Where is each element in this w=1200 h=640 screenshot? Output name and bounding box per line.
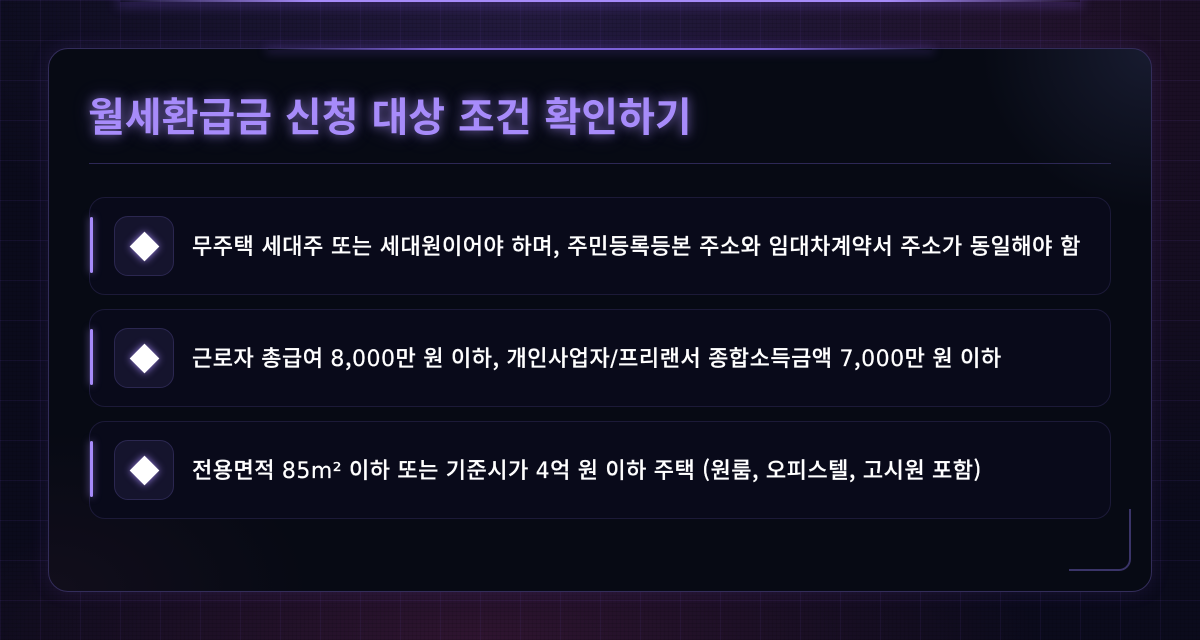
item 2 text: 근로자 총급여 8,000만 원 이하, 개인사업자/프리랜서 종합소득금액 7,000만 원 이하	[192, 341, 1002, 373]
item 1 text: 무주택 세대주 또는 세대원이어야 하며, 주민등록등본 주소와 임대차계약서 주소가 동일해야 함	[192, 229, 1081, 261]
panel: main card	[48, 48, 1152, 592]
top glow bar	[120, 0, 1080, 2]
item 3 icon: diamond	[114, 440, 174, 500]
item 2 accent bar	[90, 329, 93, 385]
item 1 accent bar	[90, 217, 93, 273]
item 3 text: 전용면적 85m² 이하 또는 기준시가 4억 원 이하 주택 (원룸, 오피스텔, 고시원 포함)	[192, 453, 982, 485]
corner bracket	[1069, 509, 1131, 571]
item 3 accent bar	[90, 441, 93, 497]
item 2 icon: diamond	[114, 328, 174, 388]
item 1 card	[89, 197, 1111, 295]
item 2 card	[89, 309, 1111, 407]
panel top glow bar	[268, 48, 932, 50]
item 3 card	[89, 421, 1111, 519]
item 1 icon: diamond	[114, 216, 174, 276]
title: 월세환급금 신청 대상 조건 확인하기	[88, 95, 692, 141]
